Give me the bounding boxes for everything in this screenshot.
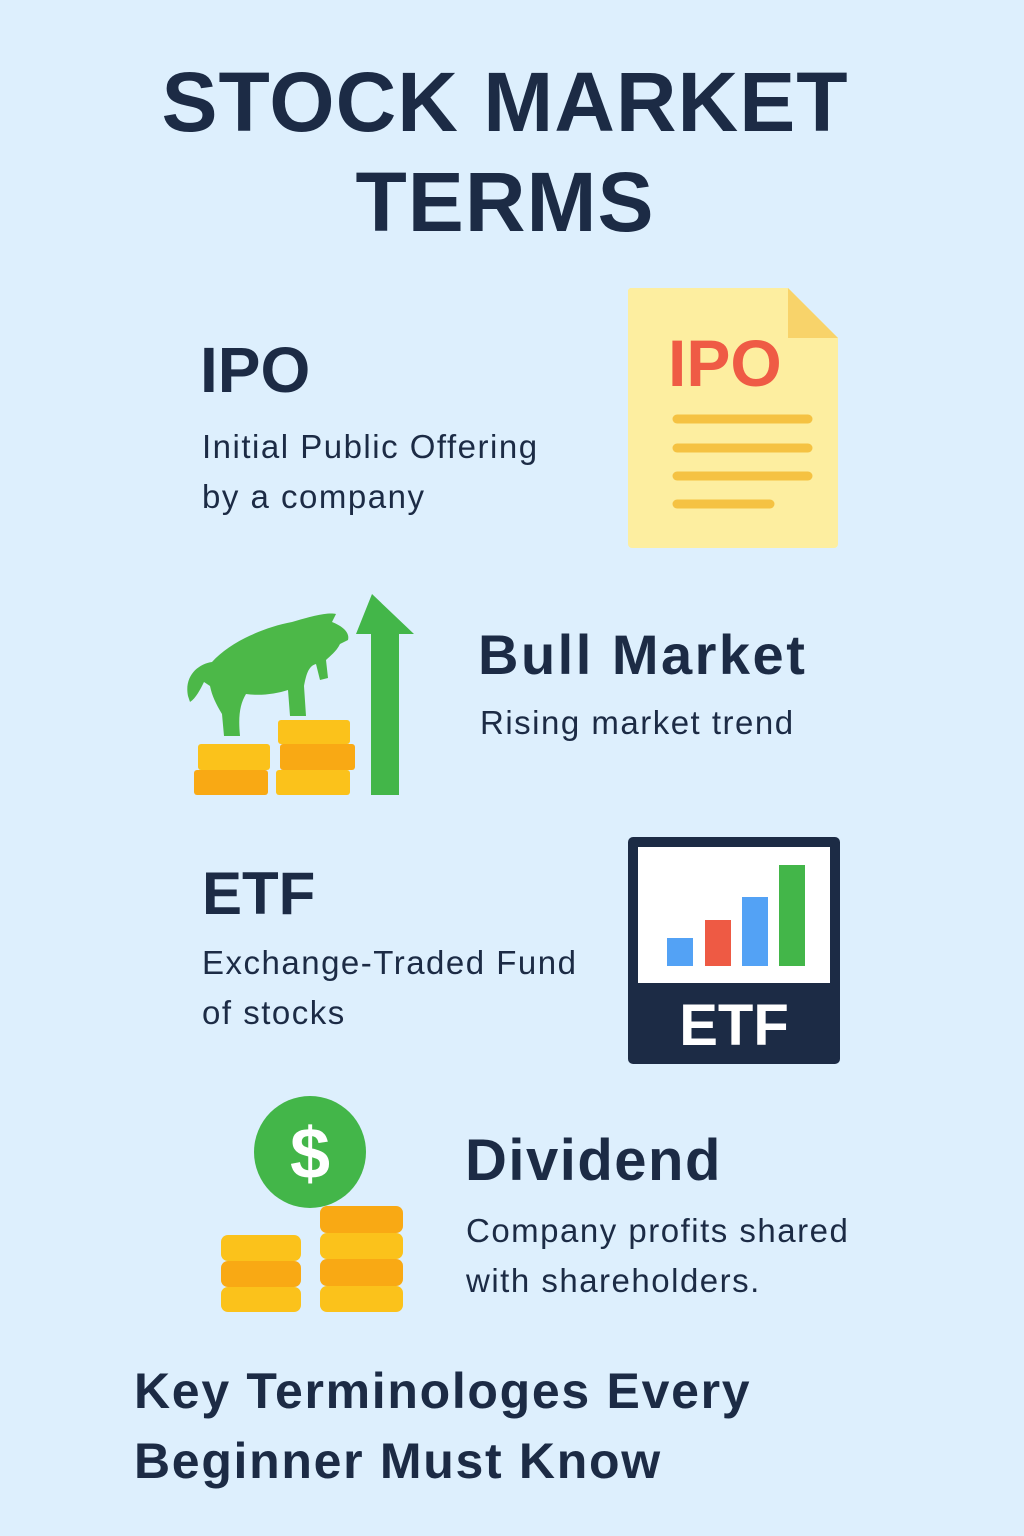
title — [161, 55, 849, 249]
text: ETF description: Exchange-Traded Fund — [202, 944, 578, 981]
text: Dividend description: Company profits shared — [466, 1212, 849, 1249]
icon: ETF chart box: ETF — [679, 993, 789, 1058]
text: ETF description: of stocks — [202, 994, 346, 1031]
heading: Dividend: Dividend — [465, 1128, 722, 1193]
footer tagline — [134, 1363, 751, 1489]
heading: IPO: IPO — [200, 334, 310, 406]
icon: bull on coins with arrow — [187, 594, 414, 795]
text: Dividend description: with shareholders. — [466, 1262, 761, 1299]
icon: IPO document — [628, 288, 838, 548]
icon: IPO document: IPO — [668, 326, 782, 400]
title: STOCK MARKET — [161, 55, 849, 149]
text: IPO description — [202, 428, 539, 515]
text: IPO description: by a company — [202, 478, 425, 515]
text: IPO description: Initial Public Offering — [202, 428, 539, 465]
heading: Bull Market: Bull Market — [478, 623, 807, 686]
title: TERMS — [356, 155, 654, 249]
footer tagline: Beginner Must Know — [134, 1433, 662, 1489]
heading: ETF: ETF — [202, 860, 315, 927]
icon: dividend coin and stacks: $ — [290, 1114, 330, 1194]
icon: dividend coin and stacks — [221, 1096, 403, 1312]
text: ETF description — [202, 944, 578, 1031]
icon: ETF chart box — [628, 837, 840, 1064]
footer tagline: Key Terminologes Every — [134, 1363, 751, 1419]
text: Dividend description — [466, 1212, 849, 1299]
text: Bull Market description: Rising market trend — [480, 704, 795, 741]
